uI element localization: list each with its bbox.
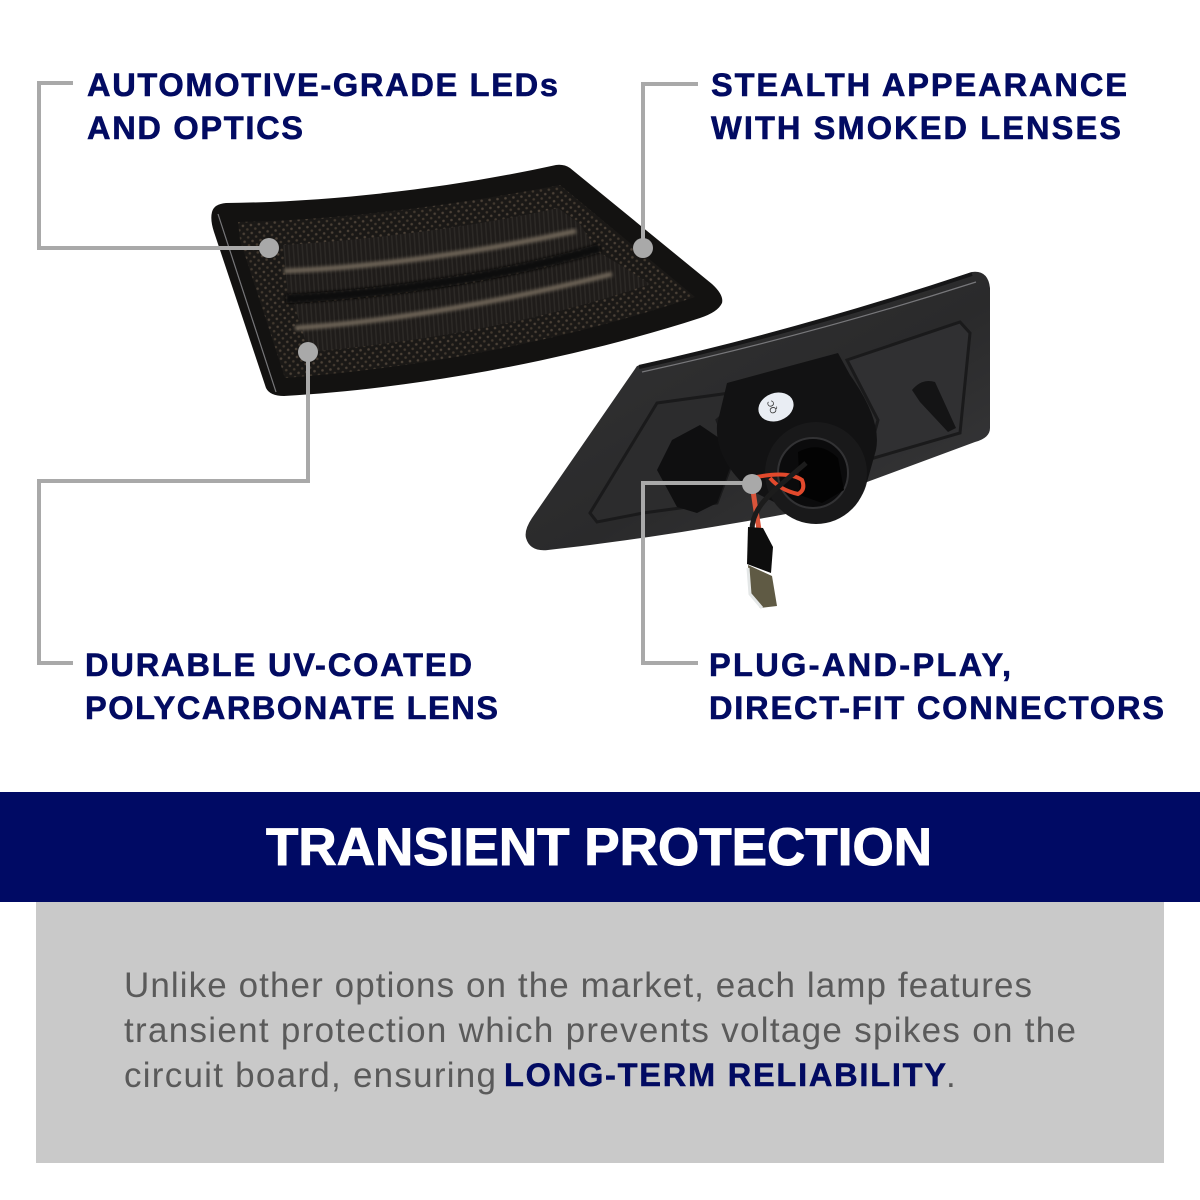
product photo: smoked lens, front view: [211, 165, 722, 396]
panel: description: transient protection which prevents voltage spikes on the: [124, 1011, 1076, 1050]
right recess: [847, 322, 970, 460]
callout: stealth appearance: STEALTH APPEARANCE: [711, 66, 1127, 103]
callout: plug-and-play connectors: DIRECT-FIT CONNECTORS: [709, 689, 1164, 726]
wires and plug: [747, 463, 806, 608]
banner: transient protection: TRANSIENT PROTECTION: [266, 818, 932, 877]
callout: automotive-grade LEDs: AUTOMOTIVE-GRADE LEDs: [87, 66, 558, 103]
QC sticker: [754, 388, 798, 426]
banner: transient protection: [0, 792, 1200, 902]
callout: plug-and-play connectors: [643, 474, 1164, 726]
callout: automotive-grade LEDs: AND OPTICS: [87, 109, 303, 146]
housing block: [717, 353, 877, 510]
callout: plug-and-play connectors: PLUG-AND-PLAY,: [709, 646, 1011, 683]
callout: durable lens: POLYCARBONATE LENS: [85, 689, 498, 726]
left recess: [590, 392, 737, 522]
QC sticker: QC: [765, 399, 779, 415]
panel: description: circuit board, ensuring: [124, 1056, 496, 1095]
panel: description: Unlike other options on the market, each lamp features: [124, 966, 1032, 1005]
panel: description: [36, 902, 1164, 1163]
retaining clip: [912, 381, 956, 432]
panel: description: .: [946, 1056, 956, 1095]
callout: durable lens: [39, 342, 498, 726]
callout: automotive-grade LEDs: [39, 66, 558, 258]
callout: durable lens: DURABLE UV-COATED: [85, 646, 472, 683]
dark window: [657, 425, 733, 513]
panel: description: LONG-TERM RELIABILITY: [504, 1056, 946, 1093]
callout: stealth appearance: WITH SMOKED LENSES: [711, 109, 1121, 146]
callout: stealth appearance: [633, 66, 1127, 258]
product photo: lamp rear with connector: [526, 272, 990, 608]
connector ring: [765, 422, 867, 524]
